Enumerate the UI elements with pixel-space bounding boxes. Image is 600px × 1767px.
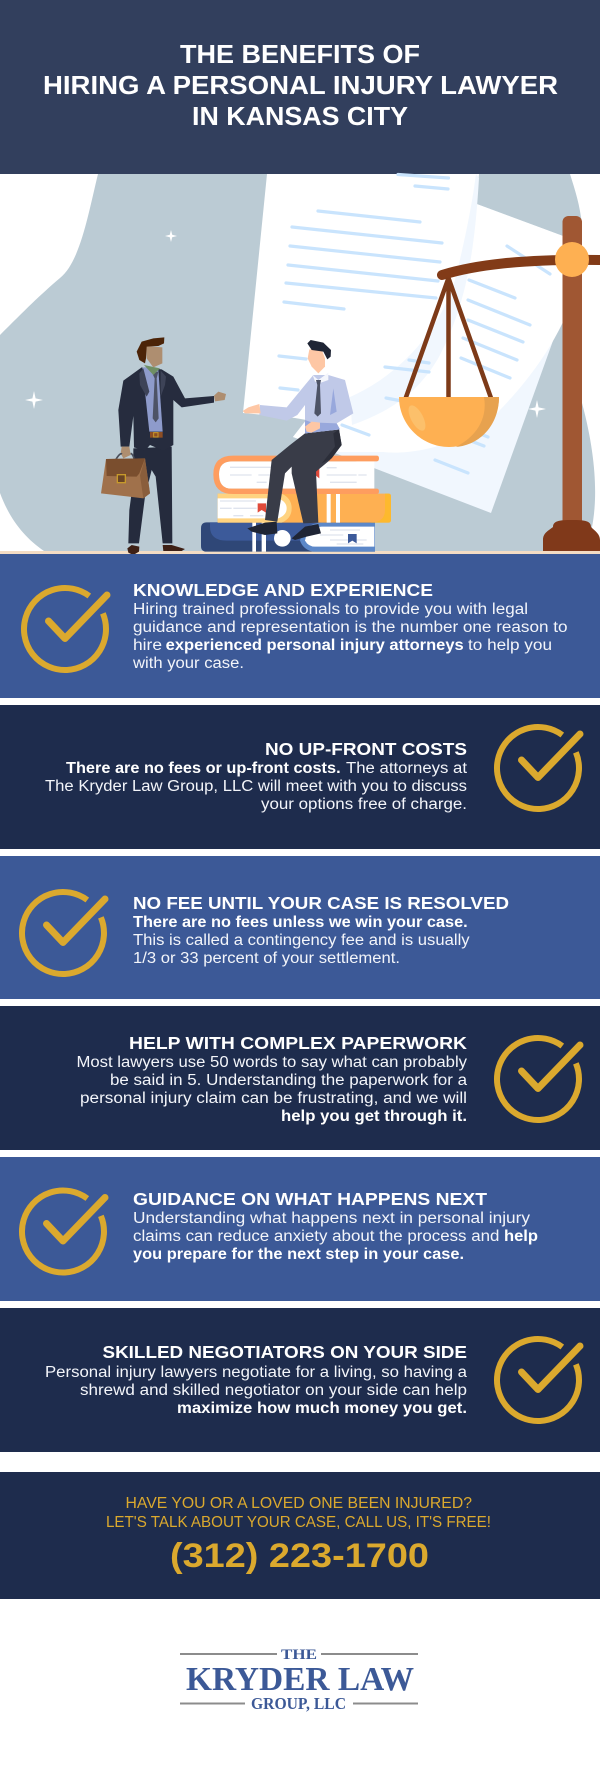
body text: Personal injury lawyers negotiate for a living, so having a: [45, 1364, 467, 1381]
body text: [133, 914, 470, 967]
heading: GUIDANCE ON WHAT HAPPENS NEXT: [133, 1189, 487, 1209]
call to action text: HAVE YOU OR A LOVED ONE BEEN INJURED?: [126, 1495, 472, 1512]
heading: KNOWLEDGE AND EXPERIENCE: [133, 580, 433, 600]
document text lines: [279, 174, 550, 473]
sparkles: [25, 230, 546, 418]
body text: experienced personal injury attorneys: [166, 637, 464, 654]
body text: Hiring trained professionals to provide you with legal: [133, 601, 528, 618]
shoes: [127, 545, 185, 555]
body text: your options free of charge.: [261, 796, 467, 813]
body text: [133, 1210, 538, 1263]
shirt: [259, 375, 353, 433]
body text: There are no fees unless we win your case.: [133, 914, 468, 931]
head: [308, 349, 325, 373]
panel: skilled negotiators: [0, 1308, 600, 1452]
icon: gold check circle: [497, 1339, 580, 1421]
icon: gold check circle: [497, 1038, 580, 1120]
body text: This is called a contingency fee and is usually: [133, 932, 470, 949]
logo: The Kryder Law Group, LLC: GROUP, LLC: [251, 1694, 346, 1713]
middle book: [218, 494, 391, 523]
document front page: [243, 174, 479, 428]
briefcase: [101, 458, 150, 498]
heading: NO FEE UNTIL YOUR CASE IS RESOLVED: [133, 893, 509, 913]
logo: The Kryder Law Group, LLC: THE: [281, 1647, 317, 1663]
icon: gold check circle: [497, 727, 580, 809]
body text: [45, 1364, 467, 1417]
man sitting on books: [243, 340, 353, 540]
header banner: [0, 0, 600, 174]
call to action panel: [0, 1472, 600, 1599]
panel: no up-front costs: [0, 705, 600, 849]
panel: no fee until resolved: [0, 856, 600, 999]
jacket: [118, 367, 214, 451]
illustration: lawyer consultation with scales of justice: [0, 174, 600, 555]
body text: [45, 760, 468, 813]
hands: [243, 404, 320, 433]
floor line: [0, 551, 600, 554]
background blob: [0, 174, 595, 551]
body text: you prepare for the next step in your case.: [133, 1246, 464, 1263]
body text: Understanding what happens next in personal injury: [133, 1210, 530, 1227]
logo: The Kryder Law Group, LLC: [180, 1647, 418, 1713]
trousers: [265, 429, 342, 523]
books stack: [201, 456, 391, 552]
logo: The Kryder Law Group, LLC: KRYDER LAW: [186, 1661, 414, 1698]
body text: shrewd and skilled negotiator on your side can help: [80, 1382, 467, 1399]
bottom book: [201, 522, 375, 552]
body text: [132, 601, 568, 672]
body text: [76, 1054, 467, 1125]
body text: to help you: [468, 637, 552, 654]
body text: guidance and representation is the number one reason to: [133, 619, 568, 636]
body text: Most lawyers use 50 words to say what can probably: [76, 1054, 467, 1071]
panel: knowledge and experience: [0, 554, 600, 698]
top book: [213, 456, 379, 494]
document back page: [293, 203, 563, 513]
title: HIRING A PERSONAL INJURY LAWYER: [43, 70, 558, 100]
body text: claims can reduce anxiety about the process and: [133, 1228, 499, 1245]
title: THE BENEFITS OF: [180, 39, 420, 69]
icon: gold check circle: [22, 892, 105, 974]
icon: gold check circle: [24, 588, 107, 670]
hands: [121, 392, 226, 458]
panel: help with complex paperwork: [0, 1006, 600, 1150]
heading: HELP WITH COMPLEX PAPERWORK: [129, 1033, 467, 1053]
call to action text: LET'S TALK ABOUT YOUR CASE, CALL US, IT'S FREE!: [106, 1514, 491, 1531]
body text: The Kryder Law Group, LLC will meet with you to discuss: [45, 778, 467, 795]
phone number: (312) 223-1700: [170, 1537, 429, 1575]
body text: There are no fees or up-front costs.: [66, 760, 341, 777]
title: IN KANSAS CITY: [192, 101, 408, 131]
man standing with briefcase: [101, 337, 226, 555]
call to action text: [106, 1495, 491, 1531]
body text: 1/3 or 33 percent of your settlement.: [133, 950, 400, 967]
heading: NO UP-FRONT COSTS: [265, 739, 467, 759]
body text: be said in 5. Understanding the paperwork for a: [110, 1072, 467, 1089]
title: [43, 39, 558, 131]
heading: SKILLED NEGOTIATORS ON YOUR SIDE: [102, 1342, 467, 1362]
body text: hire: [133, 637, 162, 654]
panel: guidance on what happens next: [0, 1157, 600, 1301]
body text: help: [504, 1228, 538, 1245]
body text: The attorneys at: [346, 760, 468, 777]
body text: personal injury claim can be frustrating, and we will: [80, 1090, 467, 1107]
body text: help you get through it.: [281, 1108, 467, 1125]
body text: with your case.: [132, 655, 244, 672]
body text: maximize how much money you get.: [177, 1400, 467, 1417]
trousers: [128, 447, 172, 543]
icon: gold check circle: [22, 1191, 105, 1273]
head: [146, 346, 162, 367]
shoes: [247, 522, 321, 540]
scales of justice: [399, 216, 600, 551]
